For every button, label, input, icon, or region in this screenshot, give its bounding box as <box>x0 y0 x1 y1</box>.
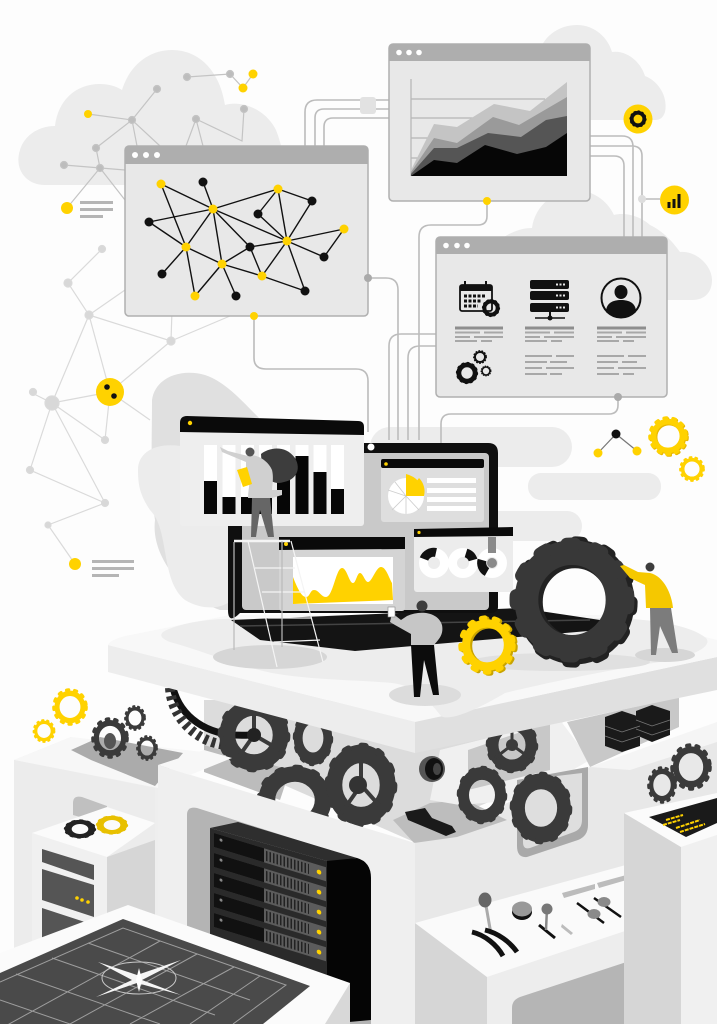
small lever <box>539 904 555 938</box>
curved black arm <box>170 688 250 745</box>
legend lines: lower left <box>92 560 134 577</box>
cloud: upper right <box>540 25 666 120</box>
indicator bars <box>561 874 630 935</box>
window: pie chart <box>381 459 484 522</box>
scaffold and ladder <box>234 541 323 667</box>
woman at chart <box>220 447 298 537</box>
window: bar chart <box>180 416 364 526</box>
wisps on right <box>370 427 661 541</box>
main block right face <box>415 722 717 1024</box>
right cabinet <box>624 793 717 1024</box>
window: donut charts <box>414 527 513 592</box>
map table <box>0 905 350 1024</box>
network graph <box>144 178 348 300</box>
cloud: middle right <box>500 190 712 300</box>
window: area chart yellow <box>279 537 405 611</box>
panel: area chart window <box>389 44 590 205</box>
gear recess <box>204 690 679 857</box>
small server cabinet <box>32 807 155 965</box>
text lines <box>455 328 646 374</box>
laptop base <box>231 608 600 651</box>
area chart <box>411 79 567 176</box>
black machine bits <box>405 808 456 836</box>
server rack <box>187 808 371 1024</box>
platform <box>108 615 717 753</box>
panel: icons window <box>436 237 667 401</box>
right gears <box>648 745 710 802</box>
sliders <box>577 897 621 923</box>
dial <box>627 890 653 913</box>
cloud: upper left <box>18 50 285 185</box>
small network: right <box>594 430 642 458</box>
platform shadow blob <box>161 618 707 717</box>
small yellow gears: left <box>34 690 86 742</box>
lever and arcs <box>472 892 517 956</box>
man with phone <box>388 600 442 697</box>
recess gears <box>170 688 570 841</box>
network: top cloud nodes <box>60 70 258 214</box>
laptop screen <box>228 443 498 618</box>
button <box>512 902 532 920</box>
badge: yellow link icon <box>96 378 124 406</box>
icon: three gears <box>457 351 491 383</box>
connectors <box>254 100 660 445</box>
recess behind cabinet <box>73 797 107 825</box>
left shelf block <box>14 737 203 1000</box>
icon: calendar with gear <box>460 281 499 316</box>
network: lower left nodes <box>26 246 230 570</box>
icon: yellow bar chart badge <box>638 186 689 214</box>
shelf servers <box>605 705 670 752</box>
console recess <box>512 950 672 1024</box>
panel: network window <box>125 146 372 320</box>
map grid <box>0 928 286 1024</box>
connector node blob <box>360 97 376 114</box>
man pushing gear <box>620 562 678 655</box>
icon: user avatar <box>602 278 640 318</box>
tray gears <box>93 706 157 760</box>
legend lines: upper left <box>80 201 113 218</box>
compass star <box>96 960 181 997</box>
laptop <box>228 443 600 651</box>
yellow gears: right <box>650 418 704 481</box>
block top ledge <box>158 750 232 775</box>
flat gears on cabinet <box>65 816 127 838</box>
icon: server stack <box>530 280 569 320</box>
blobs behind laptop <box>138 373 290 610</box>
terminal screen <box>649 798 717 837</box>
gear tray <box>71 737 183 786</box>
lens <box>419 756 445 782</box>
yellow gear center <box>461 618 515 673</box>
main block left face <box>158 765 415 1024</box>
big dark gear <box>516 542 632 662</box>
bar columns <box>204 445 344 514</box>
icon: yellow gear badge <box>624 104 652 134</box>
control console <box>415 863 688 1024</box>
server units <box>214 833 326 961</box>
